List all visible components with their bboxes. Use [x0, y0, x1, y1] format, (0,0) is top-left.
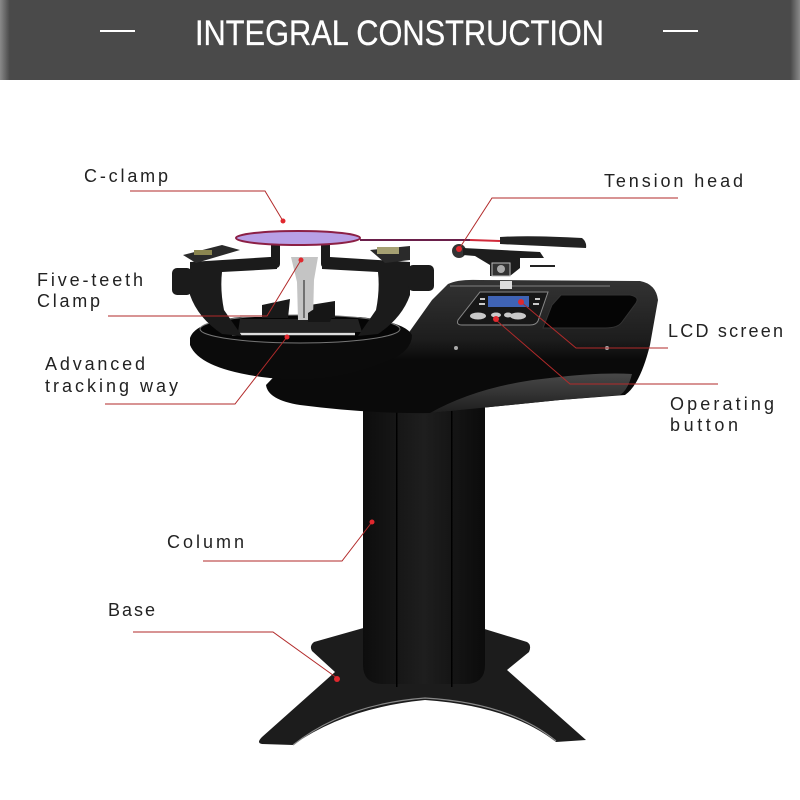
callout: LCD screen: [518, 299, 783, 348]
callout: Operating button: button: [670, 415, 738, 435]
base: [259, 627, 586, 745]
operating buttons: [470, 298, 540, 320]
callout: Base: Base: [108, 600, 155, 620]
central post: [291, 257, 335, 322]
title: INTEGRAL CONSTRUCTION: [195, 14, 604, 53]
callout: Five-teeth Clamp: [37, 258, 304, 316]
callout: Column: Column: [167, 532, 244, 552]
callout: Operating button: [493, 316, 774, 435]
control panel: [458, 292, 548, 325]
callout: C-clamp: [84, 166, 286, 224]
callout: Base: [108, 600, 340, 682]
callout: Advanced tracking way: Advanced: [45, 354, 145, 374]
main body: [266, 280, 658, 413]
callout: Advanced tracking way: [45, 334, 290, 404]
tension head: [452, 244, 555, 289]
lower highlight band: [430, 374, 632, 413]
callout: Five-teeth Clamp: Clamp: [37, 291, 100, 311]
header banner: [0, 0, 800, 80]
clamp arms: [172, 238, 434, 336]
column: [363, 400, 485, 687]
storage tray: [543, 295, 637, 328]
callout: C-clamp: C-clamp: [84, 166, 168, 186]
stringing machine: [172, 231, 658, 745]
body screws: [454, 346, 458, 350]
tracking rail: [232, 299, 362, 334]
callout: Advanced tracking way: tracking way: [45, 376, 178, 396]
callout: LCD screen: LCD screen: [668, 321, 783, 341]
turntable dish: [190, 317, 412, 380]
LCD screen: [488, 296, 529, 307]
callout: Tension head: [456, 171, 743, 252]
callout: Tension head: Tension head: [604, 171, 743, 191]
callout: Five-teeth Clamp: Five-teeth: [37, 270, 143, 290]
racket: [236, 231, 586, 248]
callout: Column: [167, 520, 374, 561]
callout: Operating button: Operating: [670, 394, 774, 414]
